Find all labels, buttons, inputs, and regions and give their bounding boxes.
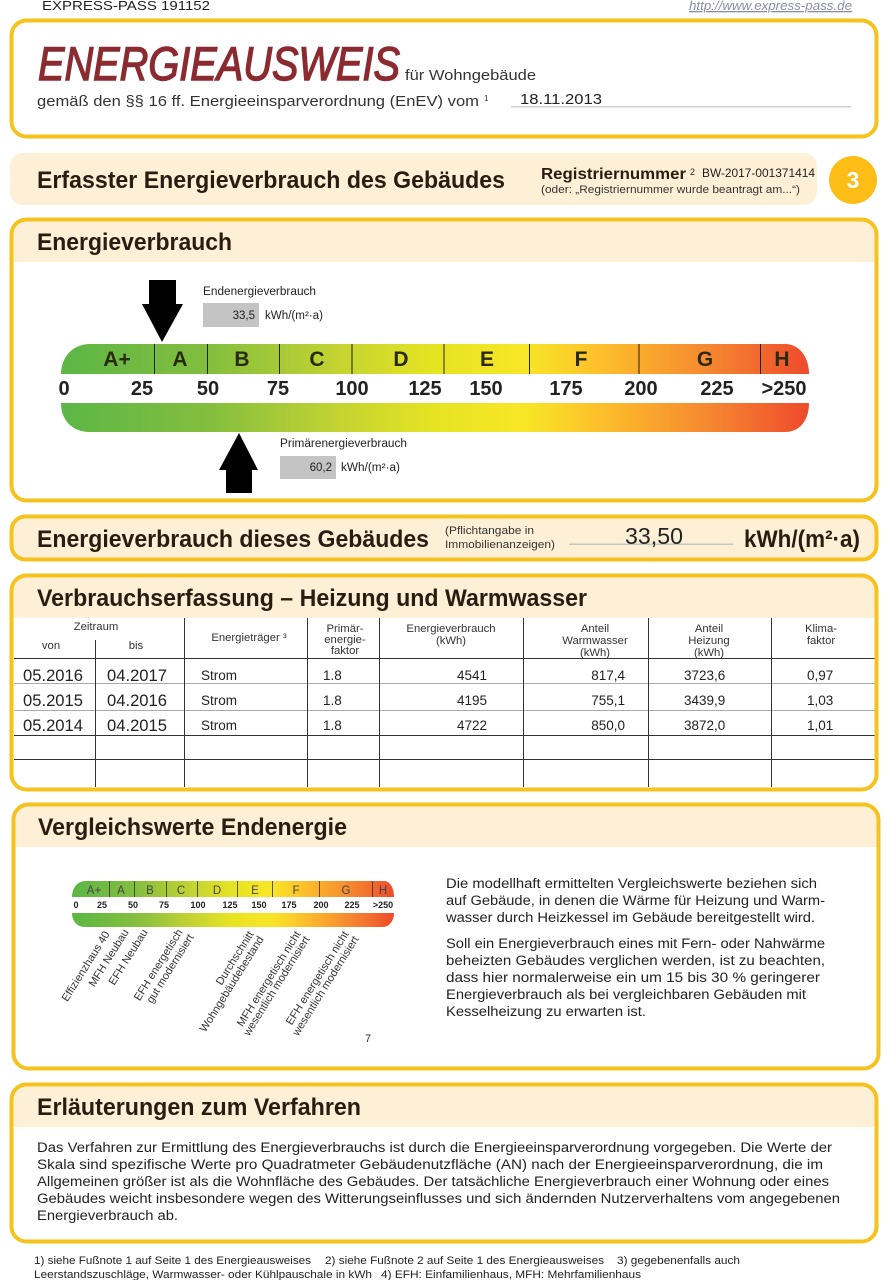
mini scale: D <box>213 885 221 897</box>
lower scale band <box>61 403 809 432</box>
final energy value: kWh/(m²·a) <box>265 310 323 322</box>
table row 2: 1.8 <box>323 693 342 708</box>
mini scale: G <box>342 885 351 897</box>
scale numbers <box>58 378 807 400</box>
footnotes: 2) siehe Fußnote 2 auf Seite 1 des Energieausweises <box>325 1255 605 1267</box>
text block: comparison explanation: Soll ein Energieverbrauch eines mit Fern- oder Nahwärme <box>446 936 825 951</box>
rotated building type labels: MFH energetisch nicht <box>235 929 304 1029</box>
footnotes: 1) siehe Fußnote 1 auf Seite 1 des Energieausweises <box>34 1255 312 1267</box>
table header: energie- <box>324 634 366 646</box>
primary energy value <box>280 438 407 479</box>
text block: method <box>37 1140 840 1223</box>
table header: Anteil <box>581 623 609 635</box>
table row 3: 05.2014 <box>23 716 83 735</box>
table header: Primär- <box>326 623 364 635</box>
table header: Zeitraum <box>74 621 118 633</box>
heading: Erläuterungen zum Verfahren <box>37 1094 361 1121</box>
note: Immobilienanzeigen) <box>445 539 555 551</box>
rotated building type labels: MFH Neubau <box>87 927 132 989</box>
panel: method explanation <box>12 1084 876 1242</box>
table row 2: 4195 <box>457 693 487 708</box>
arrow: primary energy <box>219 433 258 493</box>
upper scale band: C <box>309 348 325 371</box>
text block: method: Skala sind spezifische Werte pro Quadratmeter Gebäudenutzfläche (AN) nach der Energieeinsparverordnung, die im <box>37 1157 823 1172</box>
top reference line <box>42 0 852 13</box>
scale numbers: 200 <box>624 378 658 400</box>
rotated building type labels: Durchschnitt <box>214 929 257 987</box>
note: (Pflichtangabe in <box>445 525 534 537</box>
scale numbers: 50 <box>197 378 219 400</box>
text block: comparison explanation <box>445 876 825 1019</box>
mini scale: 25 <box>97 900 107 910</box>
upper scale band: B <box>234 348 250 371</box>
scale numbers: 125 <box>408 378 442 400</box>
table header: faktor <box>807 635 835 647</box>
scale numbers: 175 <box>549 378 583 400</box>
table header: Klima- <box>805 623 837 635</box>
table row 1: 4541 <box>457 668 487 683</box>
rotated building type labels: EFH Neubau <box>107 927 151 988</box>
table row 3: 04.2015 <box>107 716 167 735</box>
table header: Heizung <box>688 635 730 647</box>
upper scale band: H <box>774 348 790 371</box>
scale numbers: >250 <box>761 378 807 400</box>
table row 3: Strom <box>201 718 237 733</box>
badge: page number <box>829 156 877 204</box>
rotated building type labels: wesentlich modernisiert <box>290 934 362 1039</box>
text block: method: Allgemeinen größer ist als die Wohnfläche des Gebäudes. Der tatsächliche Energieverbrauch einer Wohnung oder eines <box>37 1174 829 1189</box>
marker number: 7 <box>365 1033 371 1045</box>
mini scale: 150 <box>251 900 267 910</box>
rotated building type labels: EFH energetisch <box>132 927 186 1003</box>
table row 3: 1,01 <box>807 718 833 733</box>
mini scale: >250 <box>373 900 393 910</box>
upper scale band: D <box>393 348 409 371</box>
text block: method: Das Verfahren zur Ermittlung des Energieverbrauchs ist durch die Energieeinsparverordnung vorgegeben. Die Werte der <box>37 1140 833 1155</box>
mini scale: A+ <box>87 885 101 897</box>
registration label: Registriernummer <box>541 166 686 183</box>
rotated building type labels: gut modernisiert <box>145 932 197 1005</box>
text block: comparison explanation: beheizten Gebäudes verglichen werden, ist zu beachten, <box>446 953 825 968</box>
primary energy value: 60,2 <box>310 462 332 474</box>
mini scale: E <box>251 885 259 897</box>
title: ENERGIEAUSWEIS <box>38 37 400 90</box>
registration number: BW-2017-001371414 <box>702 168 816 180</box>
value underline <box>569 544 733 545</box>
table row 1: 3723,6 <box>684 668 725 683</box>
upper scale band: A <box>172 348 188 371</box>
heading: Energieverbrauch <box>37 229 232 256</box>
table header: bis <box>129 640 144 652</box>
heading: Vergleichswerte Endenergie <box>38 814 347 841</box>
mini scale: F <box>292 885 300 897</box>
panel: building consumption <box>12 516 876 560</box>
footnotes <box>34 1255 740 1280</box>
scale numbers: 150 <box>469 378 503 400</box>
final energy value: 33,5 <box>233 310 255 322</box>
footnote mark: 2 <box>690 167 695 177</box>
heading: Verbrauchserfassung – Heizung und Warmwasser <box>37 585 587 612</box>
table row 1: 0,97 <box>807 668 833 683</box>
table row 1: 1.8 <box>323 668 342 683</box>
table header: von <box>42 640 60 652</box>
final energy value <box>203 286 323 327</box>
table header: Energieverbrauch <box>406 623 496 635</box>
value: 33,50 <box>625 523 683 549</box>
table header: Warmwasser <box>562 635 628 647</box>
upper scale band: E <box>480 348 494 371</box>
panel: section banner <box>10 153 817 205</box>
table row 1: Strom <box>201 668 237 683</box>
note <box>445 525 555 551</box>
table <box>14 618 875 787</box>
footnote mark: 1 <box>484 94 489 103</box>
table header: faktor <box>331 645 359 657</box>
mini scale <box>72 881 394 927</box>
upper scale band: F <box>575 348 588 371</box>
banner heading: Erfasster Energieverbrauch des Gebäudes <box>37 167 505 194</box>
table row 3: 1.8 <box>323 718 342 733</box>
table row 2: 3439,9 <box>684 693 725 708</box>
mini scale: 125 <box>222 900 238 910</box>
table row 1 <box>23 666 833 685</box>
table header <box>42 621 837 659</box>
mini scale: 100 <box>190 900 206 910</box>
table row 3: 3872,0 <box>684 718 725 733</box>
rotated building type labels: Wohngebäudebestand <box>198 934 267 1034</box>
table header: Anteil <box>695 623 723 635</box>
legal basis line: gemäß den §§ 16 ff. Energieeinsparverordnung (EnEV) vom <box>37 93 479 110</box>
table row 2: Strom <box>201 693 237 708</box>
panel: energy consumption <box>12 220 876 500</box>
mini scale: 200 <box>313 900 329 910</box>
panel: consumption records <box>12 576 876 790</box>
upper scale band: A+ <box>103 348 131 371</box>
table header: Energieträger ³ <box>211 632 287 644</box>
text block: method: Gebäudes weicht insbesondere wegen des Witterungseinflusses und sich ändernden Nutzerverhaltens vom angegebenen <box>37 1191 840 1206</box>
rotated building type labels <box>60 927 362 1039</box>
text block: method: Energieverbrauch ab. <box>37 1208 178 1223</box>
table row 2 <box>23 691 833 710</box>
scale numbers: 0 <box>58 378 70 400</box>
registration note: (oder: „Registriernummer wurde beantragt am...“) <box>541 184 800 196</box>
unit: kWh/(m²·a) <box>744 526 860 553</box>
mini scale: B <box>146 885 154 897</box>
upper scale band <box>61 344 809 374</box>
mini scale: 50 <box>128 900 138 910</box>
table row 3: 850,0 <box>591 718 625 733</box>
text block: comparison explanation: Kesselheizung zu erwarten ist. <box>446 1004 646 1019</box>
mini scale: A <box>117 885 125 897</box>
scale numbers: 100 <box>335 378 369 400</box>
scale numbers: 25 <box>131 378 153 400</box>
date underline <box>511 106 851 108</box>
text block: comparison explanation: dass hier normalerweise ein um 15 bis 30 % geringerer <box>446 970 821 985</box>
final energy value: Endenergieverbrauch <box>203 286 316 298</box>
table row 1: 04.2017 <box>107 666 167 685</box>
table header: (kWh) <box>436 635 466 647</box>
table header: (kWh) <box>580 647 610 659</box>
table row 2: 05.2015 <box>23 691 83 710</box>
table row 2: 755,1 <box>591 693 625 708</box>
scale numbers: 225 <box>700 378 734 400</box>
date: 18.11.2013 <box>520 91 602 108</box>
mini scale: H <box>379 885 387 897</box>
rotated building type labels: wesentlich modernisiert <box>241 934 313 1039</box>
footnotes: 3) gegebenenfalls auch <box>617 1255 740 1267</box>
badge: page number: 3 <box>847 167 859 193</box>
primary energy value: Primärenergieverbrauch <box>280 438 407 450</box>
table row 1: 817,4 <box>591 668 625 683</box>
scale numbers: 75 <box>267 378 289 400</box>
subtitle: für Wohngebäude <box>405 67 536 84</box>
heading: Energieverbrauch dieses Gebäudes <box>37 526 429 553</box>
text block: comparison explanation: Die modellhaft ermittelten Vergleichswerte beziehen sich <box>446 876 817 891</box>
text block: comparison explanation: Energieverbrauch als bei vergleichbaren Gebäuden mit <box>446 987 806 1002</box>
rotated building type labels: EFH energetisch nicht <box>284 929 352 1027</box>
arrow: final energy <box>142 280 183 342</box>
mini scale: 75 <box>159 900 169 910</box>
panel: comparison values <box>14 804 878 1068</box>
table row 3: 4722 <box>457 718 487 733</box>
text block: comparison explanation: auf Gebäude, in denen die Wärme für Heizung und Warm- <box>446 893 825 908</box>
mini scale: 175 <box>281 900 297 910</box>
rotated building type labels: Effizienzhaus 40 <box>60 929 113 1004</box>
mini scale: C <box>177 885 185 897</box>
mini scale: 0 <box>73 900 79 910</box>
table row 1: 05.2016 <box>23 666 83 685</box>
table header: (kWh) <box>694 647 724 659</box>
panel: title <box>12 20 876 136</box>
primary energy value: kWh/(m²·a) <box>341 462 400 474</box>
mini scale: 225 <box>344 900 360 910</box>
text block: comparison explanation: wasser durch Heizkessel im Gebäude bereitgestellt wird. <box>445 910 815 925</box>
upper scale band: G <box>697 348 713 371</box>
table row 2: 04.2016 <box>107 691 167 710</box>
table row 3 <box>23 716 833 735</box>
table row 2: 1,03 <box>807 693 833 708</box>
